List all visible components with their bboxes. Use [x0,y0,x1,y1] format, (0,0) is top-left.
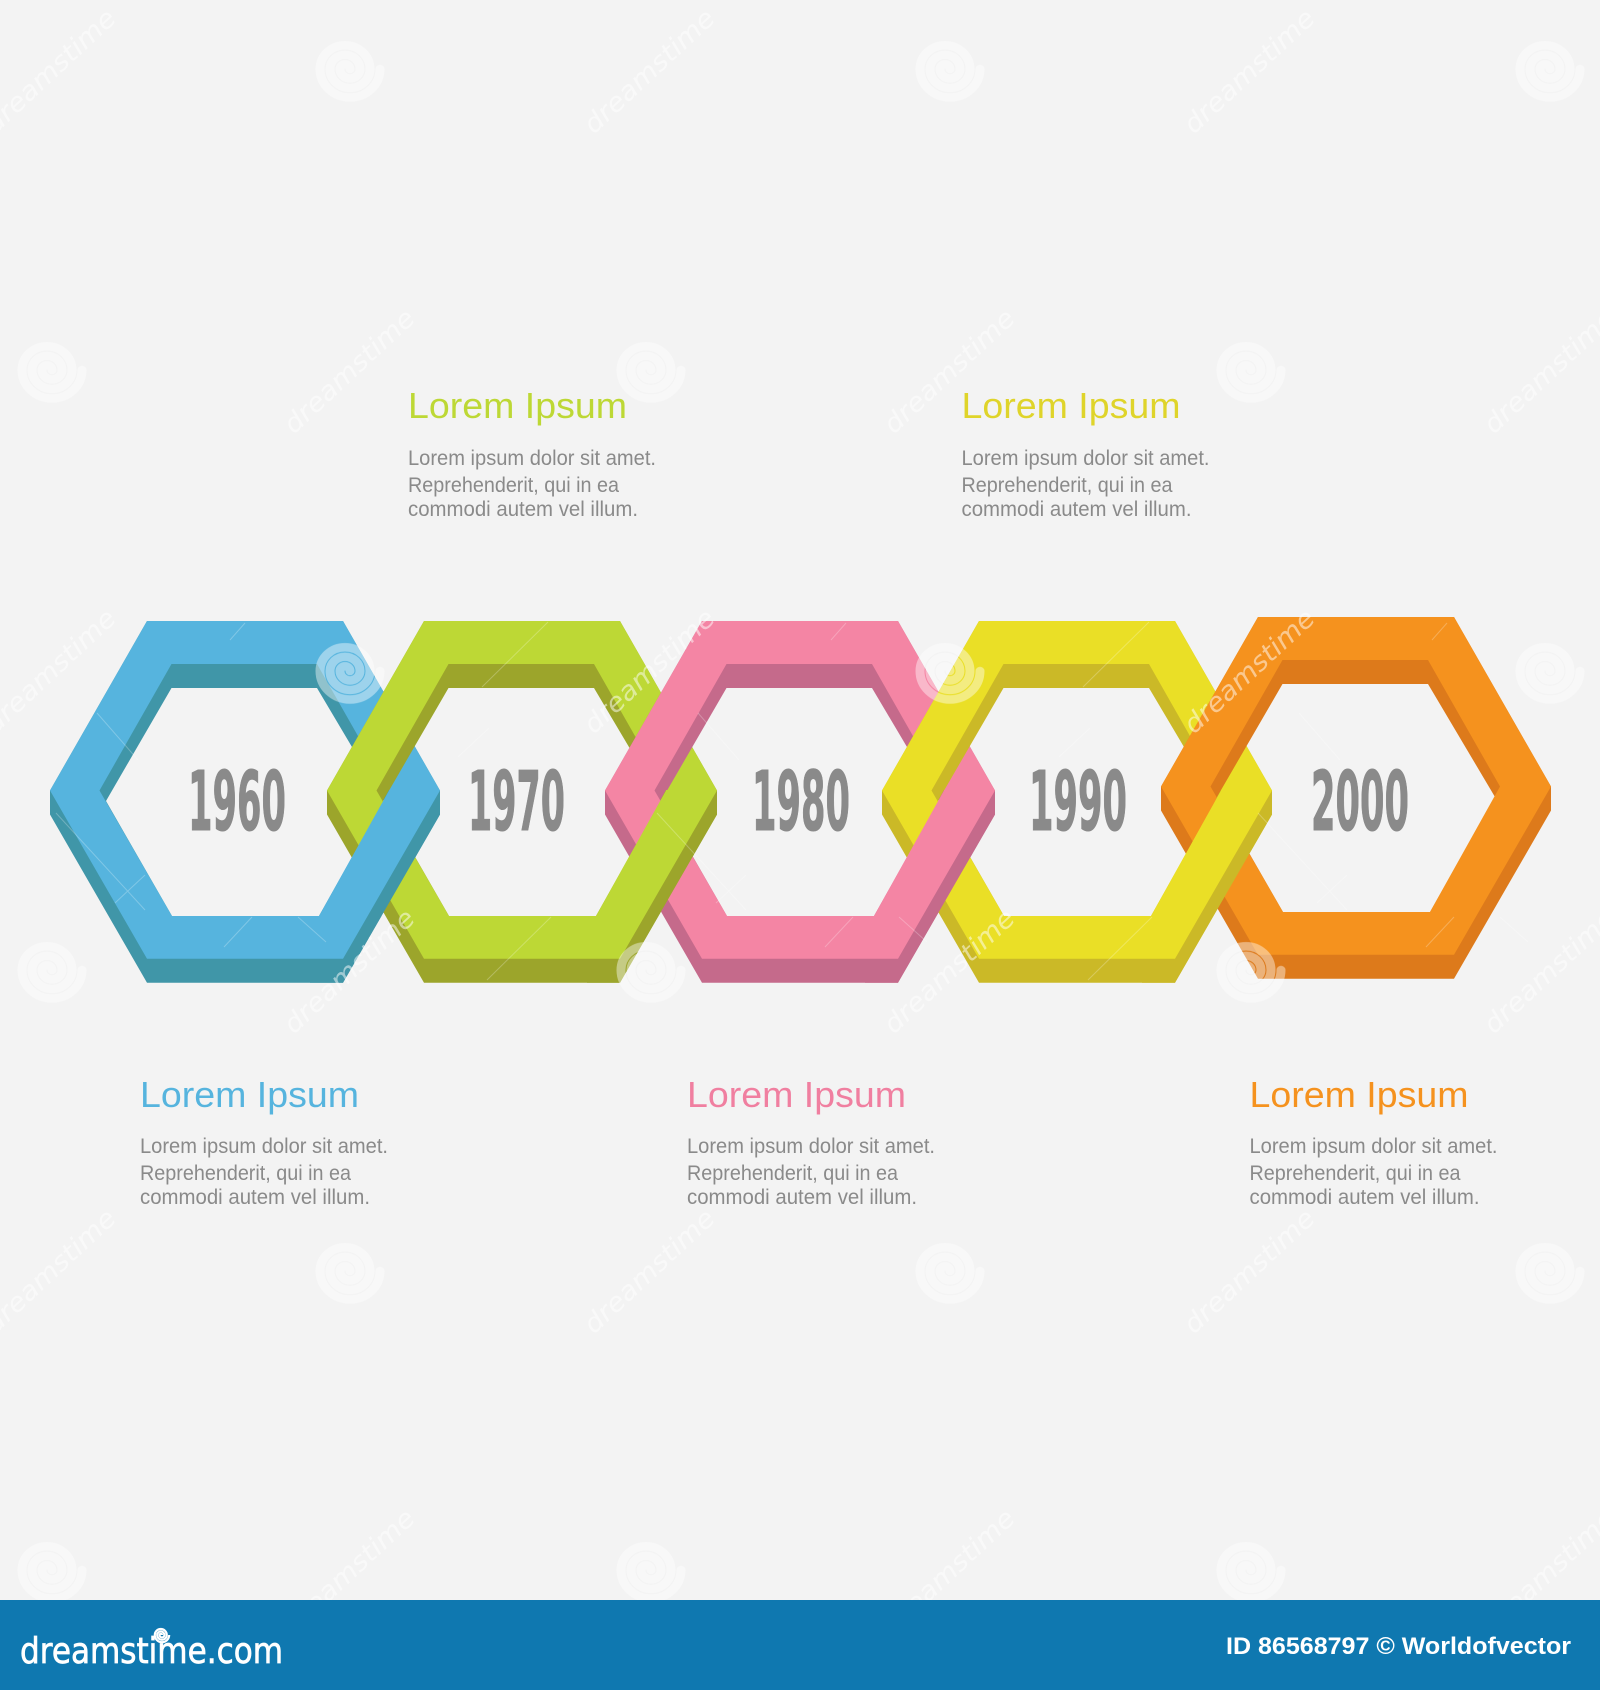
text block: pink, bottom [687,1074,935,1209]
text block: blue, bottom: Reprehenderit, qui in ea [140,1162,351,1185]
text block: green, top: Lorem ipsum dolor sit amet. [408,447,656,470]
watermark: dreamstime text: dreamstime [1178,1203,1321,1340]
year labels: 1990 [1029,755,1127,850]
text block: yellow, top: Lorem Ipsum [962,385,1180,426]
watermark: dreamstime text: dreamstime [1178,3,1321,140]
watermark: thin lines [56,622,1600,980]
text block: orange, bottom [1250,1074,1498,1209]
year labels: 1970 [468,755,565,850]
text block: yellow, top: Lorem ipsum dolor sit amet. [962,447,1210,470]
text block: orange, bottom: Reprehenderit, qui in ea [1250,1162,1461,1185]
hexagon ring: 1960 blue [50,621,440,983]
text block: green, top [408,385,656,521]
year labels [188,755,1409,850]
watermark: dreamstime text: dreamstime [578,603,721,740]
hexagon ring: 1970 green [327,621,717,983]
text block: blue, bottom: Lorem ipsum dolor sit amet. [140,1135,388,1158]
text block: blue, bottom: commodi autem vel illum. [140,1186,370,1209]
text block: orange, bottom: Lorem ipsum dolor sit amet. [1250,1135,1498,1158]
text block: yellow, top: Reprehenderit, qui in ea [962,474,1173,497]
text block: pink, bottom: Lorem Ipsum [687,1074,906,1115]
watermark: dreamstime text: dreamstime [878,1503,1021,1640]
footer credit: ID 86568797 © Worldofvector [1226,1633,1571,1660]
footer logo text: dreamstime.com [20,1631,283,1672]
year labels: 1980 [752,755,850,850]
text: 2000 [1311,755,1409,850]
text block: yellow, top [962,385,1210,521]
watermark: dreamstime text: dreamstime [278,903,421,1040]
footer bar [0,1600,1600,1690]
text block: blue, bottom: Lorem Ipsum [140,1074,359,1115]
watermark: dreamstime text: dreamstime [578,1203,721,1340]
watermark: dreamstime text: dreamstime [878,303,1021,440]
watermark: dreamstime text: dreamstime [878,903,1021,1040]
text block: pink, bottom: commodi autem vel illum. [687,1186,917,1209]
text block: pink, bottom: Lorem ipsum dolor sit amet. [687,1135,935,1158]
text block: orange, bottom: commodi autem vel illum. [1250,1186,1480,1209]
icon: footer spiral [155,1629,169,1642]
weave: pink lower strand over yellow [865,790,995,983]
text block: green, top: Lorem Ipsum [408,385,627,426]
watermark: dreamstime text: dreamstime [1178,603,1321,740]
chain of interlocked hexagons [50,617,1551,983]
weave: yellow lower strand over orange [1142,790,1272,983]
weave: green lower strand over pink [587,790,717,983]
year labels: 1960 [188,755,286,850]
watermark: dreamstime text: dreamstime [578,3,721,140]
text block: orange, bottom: Lorem Ipsum [1250,1074,1468,1115]
text block: yellow, top: commodi autem vel illum. [962,498,1192,521]
watermark: dreamstime text: dreamstime [278,303,421,440]
text block: blue, bottom [140,1074,388,1209]
text block: green, top: commodi autem vel illum. [408,498,638,521]
hexagon ring: 2000 orange [1161,617,1551,979]
text block: pink, bottom: Reprehenderit, qui in ea [687,1162,898,1185]
watermark: dreamstime text: dreamstime [278,1503,421,1640]
text block: green, top: Reprehenderit, qui in ea [408,474,619,497]
hexagon ring: 1980 pink [605,621,995,983]
hexagon ring: 1990 yellow [882,621,1272,983]
weave: blue lower strand over green [310,790,440,983]
